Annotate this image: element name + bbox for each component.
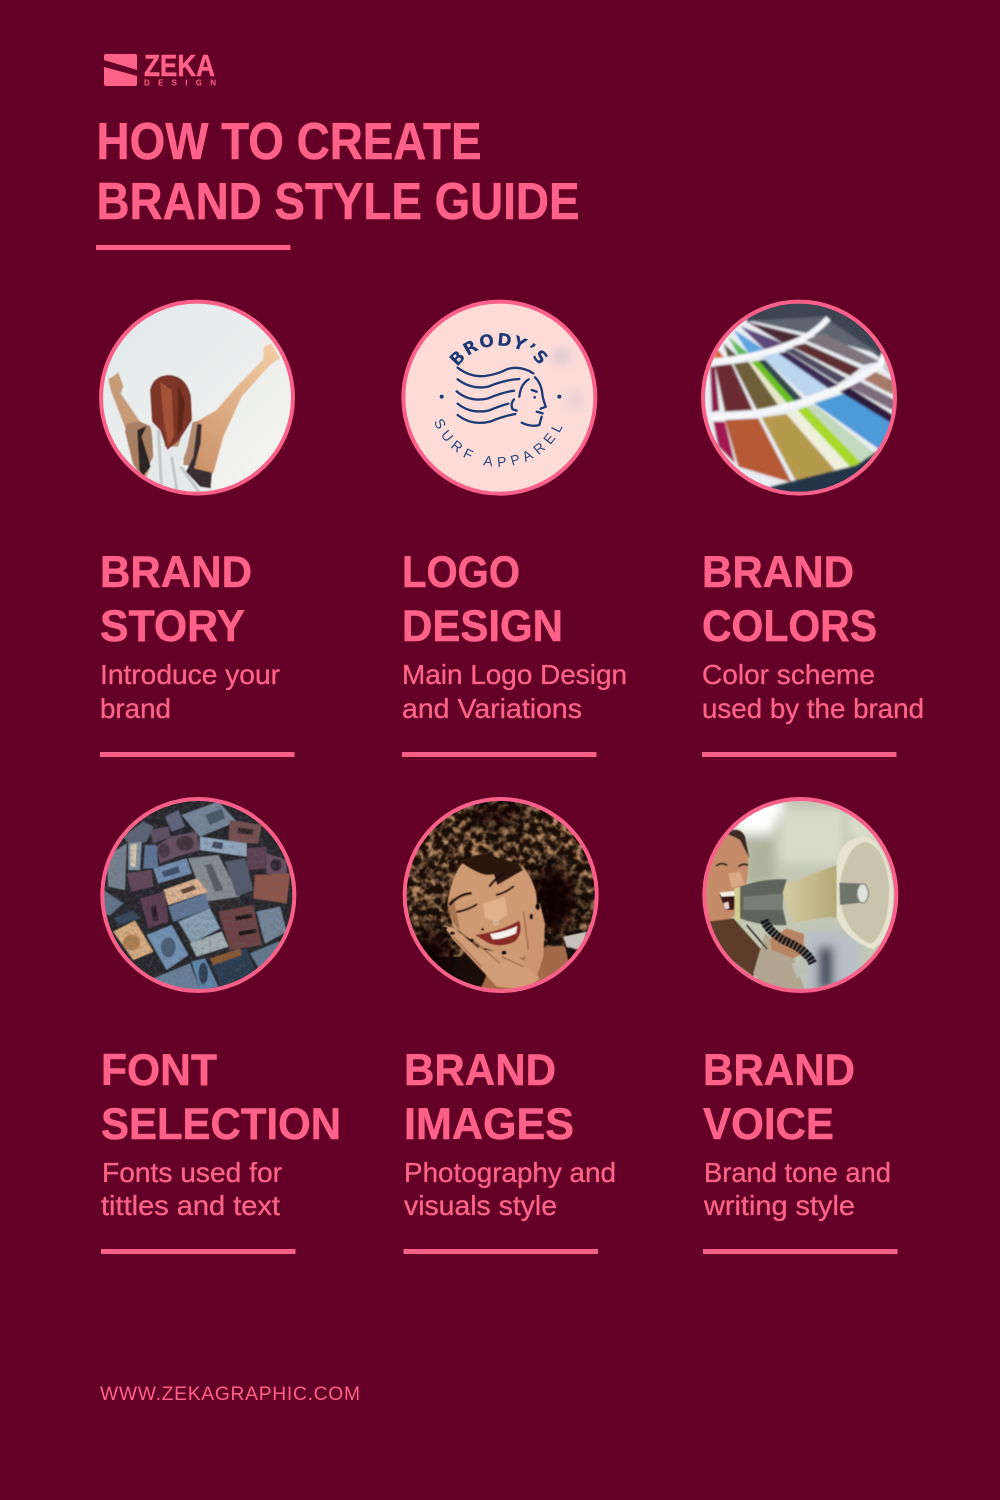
heading: brand voice: BRAND <box>703 1046 855 1095</box>
footer website: WWW.ZEKAGRAPHIC.COM <box>100 1384 360 1405</box>
panel: font selection <box>90 790 341 1254</box>
description: brand voice: Brand tone and <box>704 1157 891 1188</box>
heading: logo design: DESIGN <box>402 602 563 651</box>
divider: logo design <box>402 752 596 757</box>
divider: brand images <box>404 1249 598 1254</box>
image: smiling woman with curly hair <box>402 797 599 993</box>
image: color swatch fan <box>701 300 897 496</box>
title <box>96 113 580 231</box>
panel: brand colors <box>690 290 924 757</box>
heading: font selection <box>101 1046 341 1149</box>
panel: brand images <box>390 790 616 1254</box>
title: HOW TO CREATE <box>96 113 482 171</box>
panel: brand voice <box>702 797 898 1254</box>
description: logo design: and Variations <box>402 693 582 724</box>
panel: logo design <box>401 300 627 757</box>
image: Brody's surf apparel logo <box>401 300 598 496</box>
heading: brand colors <box>702 548 877 651</box>
description: brand voice: writing style <box>703 1190 855 1221</box>
heading: brand images: BRAND <box>404 1046 556 1095</box>
description: logo design <box>402 659 627 724</box>
description: brand voice <box>703 1157 891 1221</box>
heading: font selection: SELECTION <box>101 1100 341 1149</box>
description: brand colors: Color scheme <box>702 659 875 690</box>
description: brand images: visuals style <box>404 1190 557 1221</box>
heading: brand colors: BRAND <box>702 548 854 597</box>
description: font selection: Fonts used for <box>102 1157 282 1188</box>
logo: Zeka Design: DESIGN <box>144 78 216 88</box>
description: logo design: Main Logo Design <box>402 659 627 690</box>
panel: brand story <box>99 300 295 757</box>
divider: brand voice <box>703 1249 898 1254</box>
description: brand colors <box>702 659 924 724</box>
heading: brand story: STORY <box>100 602 245 651</box>
heading: brand colors: COLORS <box>702 602 877 651</box>
heading: font selection: FONT <box>101 1046 217 1095</box>
heading: brand images: IMAGES <box>404 1100 574 1149</box>
image: woman shouting into megaphone <box>702 797 898 993</box>
image: Brody's surf apparel logo: BRODY’S <box>449 332 548 366</box>
image: woman raising arms <box>99 300 295 496</box>
logo: Zeka Design <box>104 49 216 88</box>
divider: brand story <box>100 752 294 757</box>
heading: brand voice: VOICE <box>703 1100 834 1149</box>
image: wooden type blocks <box>100 797 296 993</box>
heading: logo design <box>402 548 563 651</box>
logo: Zeka Design: ZEKA <box>144 49 215 83</box>
description: brand story: brand <box>100 693 171 724</box>
heading: logo design: LOGO <box>402 548 520 597</box>
divider: brand colors <box>702 752 896 757</box>
description: brand colors: used by the brand <box>702 693 924 724</box>
heading: brand story <box>100 548 252 651</box>
description: brand images <box>404 1157 616 1221</box>
title: BRAND STYLE GUIDE <box>96 173 580 231</box>
description: brand story: Introduce your <box>100 659 280 690</box>
image: Brody's surf apparel logo: SURF APPAREL <box>435 419 562 467</box>
description: brand story <box>100 659 280 724</box>
description: font selection: tittles and text <box>101 1190 280 1221</box>
divider: font selection <box>101 1249 296 1254</box>
heading: brand images <box>404 1046 574 1149</box>
description: font selection <box>101 1157 282 1221</box>
description: brand images: Photography and <box>404 1157 616 1188</box>
heading: brand voice <box>703 1046 855 1149</box>
heading: brand story: BRAND <box>100 548 252 597</box>
title underline <box>96 245 290 250</box>
